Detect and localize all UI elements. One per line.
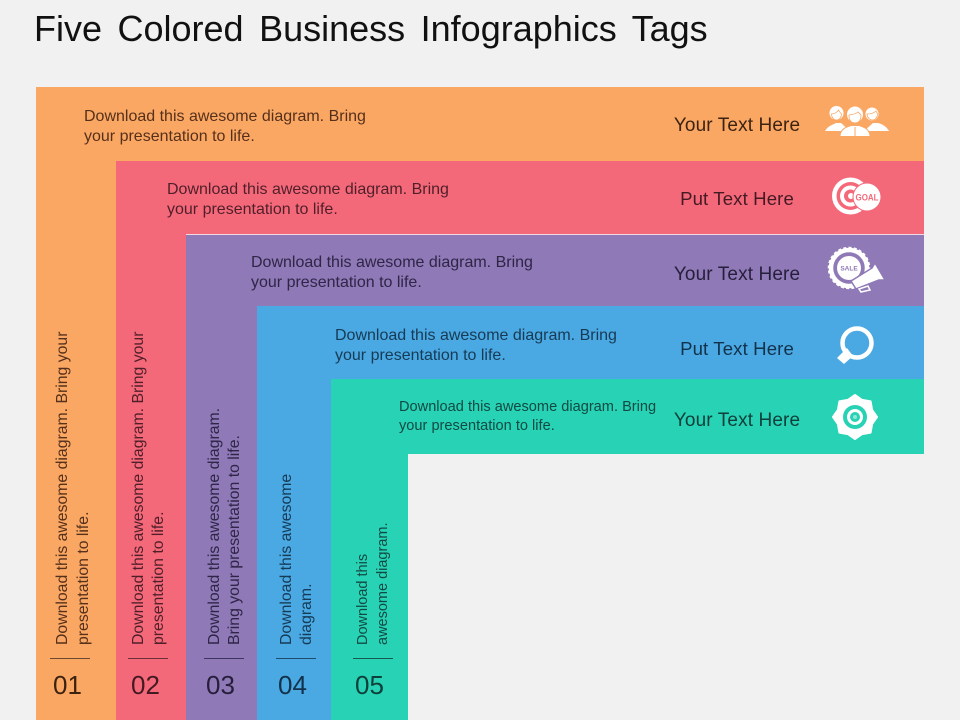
vertical text: green	[355, 522, 391, 645]
vertical text: green: awesome diagram.	[375, 522, 391, 645]
icon: people	[825, 106, 889, 136]
text block: purple	[251, 254, 533, 290]
vertical text: blue: Download this awesome	[278, 474, 295, 645]
text block: purple: your presentation to life.	[251, 274, 422, 290]
vertical text: blue	[278, 474, 315, 645]
vertical text: green: Download this	[355, 554, 371, 645]
text block: green	[399, 399, 656, 434]
panel: purple tag 03	[186, 235, 924, 720]
vertical text: purple	[206, 408, 243, 645]
text block: orange: your presentation to life.	[84, 128, 255, 144]
panel: blue tag 04	[257, 306, 924, 720]
text block: purple: Download this awesome diagram. Bring	[251, 254, 533, 271]
text block: blue: Download this awesome diagram. Bring	[335, 327, 617, 344]
vertical text: purple: Bring your presentation to life.	[226, 435, 243, 645]
icon: goal target	[832, 178, 880, 214]
text block: red	[167, 181, 449, 218]
number 04: 04	[278, 670, 307, 700]
number 03: 03	[206, 670, 235, 700]
icon: magnifier	[837, 326, 874, 364]
text block: blue	[335, 327, 617, 364]
title: Five Colored Business Infographics Tags	[34, 8, 708, 49]
vertical text: red: Download this awesome diagram. Bring your	[130, 332, 147, 645]
icon: gear	[832, 394, 878, 440]
text block: blue: your presentation to life.	[335, 346, 506, 364]
label: blue: Put Text Here	[680, 338, 794, 359]
number 01: 01	[53, 670, 82, 700]
vertical text: blue: diagram.	[298, 584, 315, 645]
icon: sale badge and megaphone: SALE	[840, 266, 858, 272]
vertical text: purple: Download this awesome diagram.	[206, 408, 223, 645]
label: green: Your Text Here	[674, 410, 800, 431]
label: red: Put Text Here	[680, 188, 794, 209]
number 05: 05	[355, 670, 384, 700]
panel: green tag 05	[331, 379, 924, 720]
text block: orange	[84, 108, 366, 144]
vertical text: red: presentation to life.	[150, 512, 167, 645]
vertical text: orange: Download this awesome diagram. Bring your	[54, 332, 71, 645]
label: purple: Your Text Here	[674, 264, 800, 285]
panel: red tag 02	[116, 161, 924, 720]
text block: green: your presentation to life.	[399, 418, 555, 434]
icon: sale badge and megaphone	[828, 246, 884, 293]
vertical text: orange	[54, 332, 92, 645]
vertical text: orange: presentation to life.	[75, 512, 92, 645]
icon: goal target: GOAL	[856, 192, 879, 202]
text block: red: Download this awesome diagram. Bring	[167, 181, 449, 198]
text block: green: Download this awesome diagram. Bring	[399, 399, 656, 415]
number 02: 02	[131, 670, 160, 700]
text block: orange: Download this awesome diagram. Bring	[84, 108, 366, 125]
text block: red: your presentation to life.	[167, 200, 338, 218]
vertical text: red	[130, 332, 167, 645]
label: orange: Your Text Here	[674, 115, 800, 136]
